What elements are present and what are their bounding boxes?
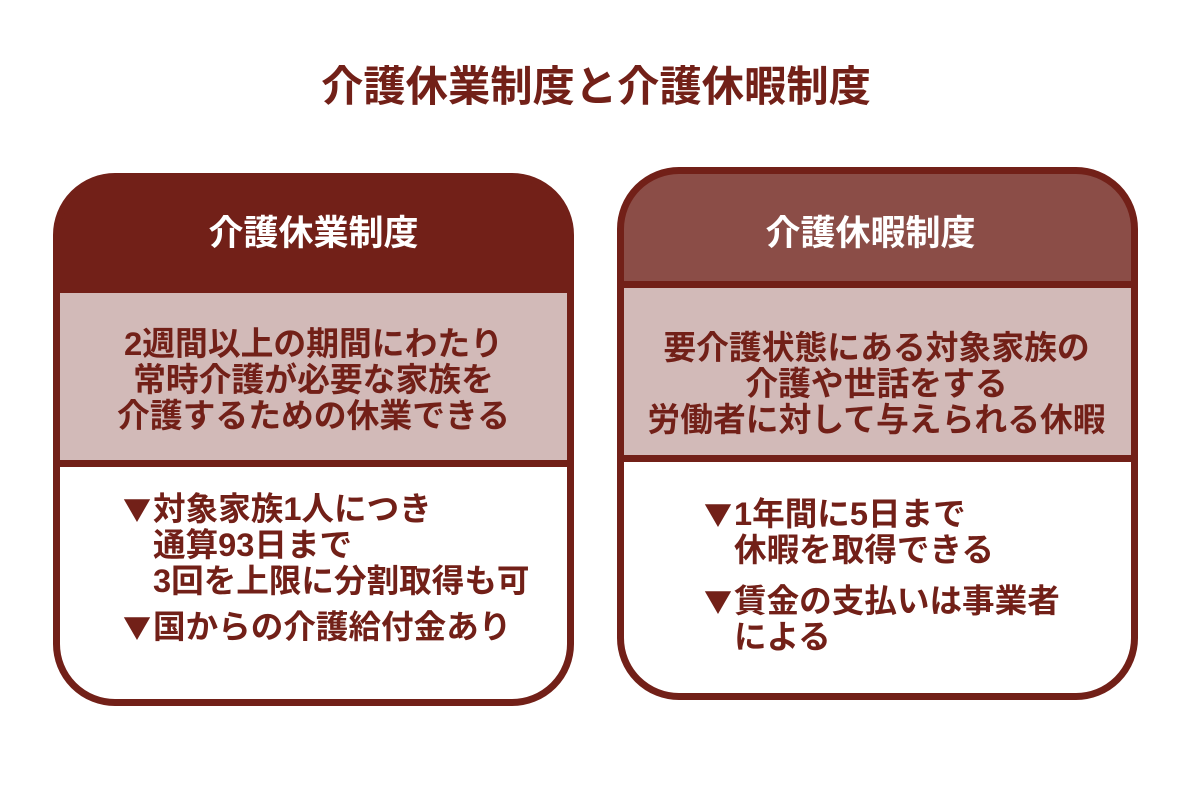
panel background (53, 173, 574, 706)
bullet: 賃金: ▼ (704, 581, 732, 621)
panel background (617, 167, 1138, 700)
panel: 介護休業制度 (53, 173, 574, 706)
bullet: 年5日: 1年間に5日まで (734, 494, 966, 532)
bullet: 賃金 (704, 581, 1060, 655)
bullet: 年5日: ▼ (704, 494, 732, 534)
bullet: 年5日 (704, 494, 994, 568)
summary text (117, 325, 510, 434)
panel: 介護休暇制度 (617, 167, 1138, 700)
title: 介護休業制度と介護休暇制度 (321, 63, 871, 110)
bullet: 対象家族: 対象家族1人につき (153, 490, 432, 526)
summary text (647, 329, 1106, 438)
bullet: 賃金: 賃金の支払いは事業者 (734, 582, 1060, 619)
summary text: 介護や世話をする (745, 365, 1008, 402)
summary text: 労働者に対して与えられる休暇 (647, 401, 1106, 438)
bullet: 年5日: 休暇を取得できる (734, 530, 994, 568)
panel heading: 介護休業制度 (208, 214, 418, 253)
bullet: 介護給付金: ▼ (123, 606, 151, 646)
bullet: 対象家族: 3回を上限に分割取得も可 (153, 562, 529, 598)
summary text: 常時介護が必要な家族を (133, 361, 494, 398)
bullet: 対象家族 (123, 488, 529, 598)
summary text: 2週間以上の期間にわたり (124, 325, 503, 362)
bullet: 介護給付金: 国からの介護給付金あり (153, 608, 511, 644)
bullet: 対象家族: 通算93日まで (153, 526, 352, 562)
panel heading: 介護休暇制度 (765, 214, 976, 253)
summary text: 介護するための休業できる (117, 397, 510, 434)
summary text: 要介護状態にある対象家族の (663, 329, 1090, 366)
bullet: 対象家族: ▼ (123, 488, 151, 528)
bullet: 賃金: による (734, 618, 831, 655)
